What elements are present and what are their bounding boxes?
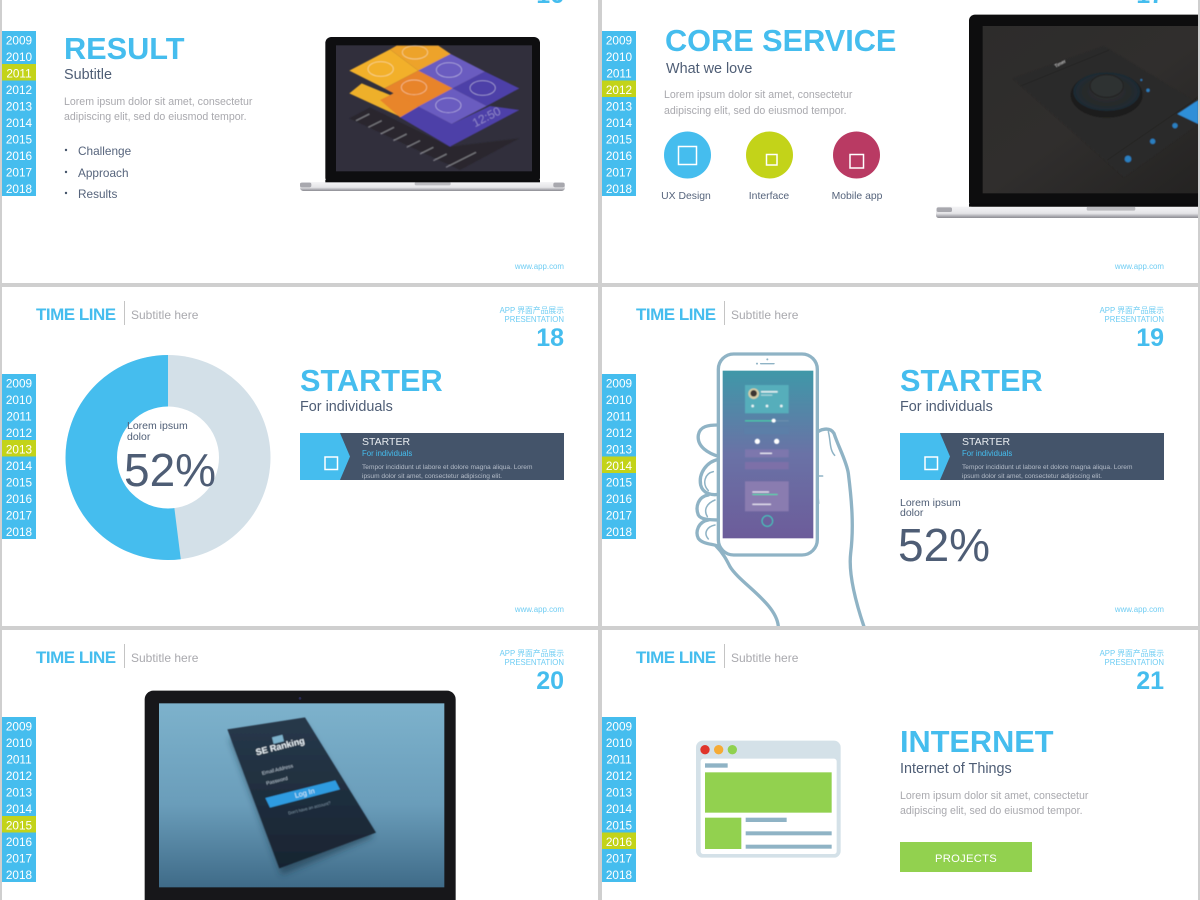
slide header: [636, 644, 799, 668]
panel: donut chart slide: [2, 287, 598, 626]
heading: CORE SERVICE: [665, 23, 896, 58]
subtitle: Internet of Things: [900, 761, 1012, 777]
year sidebar: 2014: [606, 802, 633, 816]
laptop with login screen: Log In: [294, 786, 316, 800]
year sidebar: 2009: [606, 720, 632, 734]
year sidebar: [602, 374, 636, 539]
year sidebar: 2017: [6, 852, 32, 866]
slide header: Subtitle here: [731, 651, 799, 665]
year sidebar: 2011: [6, 410, 32, 424]
donut chart 52%: [66, 355, 270, 560]
starter banner: Tempor incididunt ut labore et dolore magna aliqua. Lorem: [962, 464, 1133, 471]
presentation tag and page number: 18: [536, 324, 564, 352]
service: mobile app: Mobile app: [832, 191, 883, 202]
heading: STARTER: [900, 363, 1043, 398]
year sidebar: 2014: [6, 459, 33, 473]
starter banner: For individuals: [962, 449, 1012, 458]
year sidebar: 2015: [6, 476, 33, 490]
presentation tag and page number: APP 界面产品展示: [1100, 648, 1164, 658]
laptop with login screen: Password: [266, 776, 289, 787]
year sidebar: 2018: [606, 525, 633, 539]
year sidebar: 2016: [6, 835, 33, 849]
slide header: Subtitle here: [731, 308, 799, 322]
year sidebar: 2016: [6, 149, 33, 163]
year sidebar: 2018: [6, 182, 33, 196]
year sidebar: 2011: [6, 66, 32, 80]
year sidebar: 2017: [6, 166, 32, 180]
bullet list: Results: [78, 187, 117, 201]
presentation tag and page number: PRESENTATION: [1104, 315, 1164, 324]
statistic 52%: Lorem ipsum: [900, 497, 961, 509]
year sidebar: 2015: [606, 818, 633, 832]
presentation tag and page number: APP 界面产品展示: [1100, 305, 1164, 315]
presentation tag and page number: [500, 648, 564, 695]
presentation tag and page number: 21: [1136, 667, 1164, 695]
starter banner: STARTER: [362, 436, 410, 448]
year sidebar: 2015: [6, 818, 33, 832]
bullet list: Challenge: [78, 144, 132, 158]
year sidebar: 2012: [6, 83, 32, 97]
presentation tag and page number: APP 界面产品展示: [500, 648, 564, 658]
year sidebar: 2010: [6, 736, 33, 750]
presentation tag and page number: 20: [536, 667, 564, 695]
year sidebar: 2010: [606, 393, 633, 407]
year sidebar: 2012: [606, 769, 632, 783]
year sidebar: 2009: [606, 376, 632, 390]
year sidebar: [602, 31, 636, 196]
year sidebar: [2, 717, 36, 882]
website url: www.app.com: [1114, 605, 1164, 614]
starter banner: [900, 433, 1164, 480]
year sidebar: 2010: [6, 50, 33, 64]
year sidebar: 2014: [606, 116, 633, 130]
presentation tag and page number: PRESENTATION: [504, 658, 564, 667]
starter banner: [300, 433, 564, 480]
slide header: TIME LINE: [636, 305, 716, 324]
laptop with dark timer app: Timer: [1054, 58, 1067, 69]
panel: phone in hand slide: [602, 287, 1198, 627]
laptop with layered app screens: 12:50: [470, 104, 503, 130]
heading: STARTER: [300, 363, 443, 398]
body text: adipiscing elit, sed do eiusmod tempor.: [900, 805, 1083, 817]
subtitle: Subtitle: [64, 67, 112, 83]
slide header: [36, 301, 199, 325]
year sidebar: 2009: [6, 720, 32, 734]
year sidebar: 2015: [6, 132, 33, 146]
bullet list: [65, 144, 132, 201]
icon: browser window: [696, 741, 841, 858]
projects button: [900, 842, 1032, 872]
presentation tag and page number: 19: [1136, 324, 1164, 352]
year sidebar: 2018: [606, 868, 633, 882]
slide header: Subtitle here: [131, 651, 199, 665]
year sidebar: 2011: [606, 752, 632, 766]
slide header: TIME LINE: [36, 648, 116, 667]
starter banner: ipsum dolor sit amet, consectetur adipiscing elit.: [962, 473, 1102, 480]
website url: www.app.com: [514, 605, 564, 614]
website url: www.app.com: [514, 262, 564, 271]
year sidebar: 2018: [6, 525, 33, 539]
service: interface: [746, 132, 793, 202]
year sidebar: [2, 374, 36, 539]
presentation tag and page number: [1100, 305, 1164, 352]
presentation tag and page number: [500, 305, 564, 352]
year sidebar: 2010: [606, 50, 633, 64]
subtitle: For individuals: [900, 399, 993, 415]
body text: adipiscing elit, sed do eiusmod tempor.: [664, 105, 847, 117]
service: UX design: [661, 132, 711, 202]
year sidebar: 2012: [606, 83, 632, 97]
slide header: Subtitle here: [131, 308, 199, 322]
year sidebar: 2012: [6, 769, 32, 783]
starter banner: ipsum dolor sit amet, consectetur adipiscing elit.: [362, 473, 502, 480]
year sidebar: 2013: [606, 786, 633, 800]
statistic 52%: 52%: [898, 519, 990, 571]
year sidebar: 2013: [606, 100, 633, 114]
subtitle: For individuals: [300, 399, 393, 415]
presentation tag and page number: [1100, 648, 1164, 695]
donut chart 52%: 52%: [124, 444, 216, 496]
year sidebar: 2010: [606, 736, 633, 750]
service: UX design: UX Design: [661, 191, 711, 202]
slide header: [36, 644, 199, 668]
projects button: PROJECTS: [935, 853, 997, 865]
year sidebar: 2011: [606, 66, 632, 80]
year sidebar: 2009: [6, 376, 32, 390]
heading: INTERNET: [900, 724, 1054, 759]
illustration: hand holding phone: [697, 354, 864, 627]
service: mobile app: [832, 132, 883, 202]
year sidebar: 2017: [606, 852, 632, 866]
year sidebar: 2013: [606, 442, 633, 456]
year sidebar: 2018: [606, 182, 633, 196]
year sidebar: 2012: [606, 426, 632, 440]
year sidebar: 2014: [606, 459, 633, 473]
laptop with login screen: SE Ranking: [255, 735, 306, 757]
year sidebar: 2015: [606, 476, 633, 490]
slide header: [636, 301, 799, 325]
body text: adipiscing elit, sed do eiusmod tempor.: [64, 111, 247, 123]
year sidebar: 2014: [6, 802, 33, 816]
body text: Lorem ipsum dolor sit amet, consectetur: [664, 89, 853, 101]
year sidebar: 2011: [6, 752, 32, 766]
presentation tag and page number: APP 界面产品展示: [500, 305, 564, 315]
heading: RESULT: [64, 31, 185, 66]
year sidebar: 2009: [6, 34, 32, 48]
body text: Lorem ipsum dolor sit amet, consectetur: [900, 790, 1089, 802]
year sidebar: 2016: [606, 835, 633, 849]
panel: core service slide: [602, 0, 1200, 283]
starter banner: STARTER: [962, 436, 1010, 448]
statistic 52%: dolor: [900, 507, 924, 519]
service: interface: Interface: [749, 191, 789, 202]
year sidebar: 2015: [606, 132, 633, 146]
year sidebar: 2012: [6, 426, 32, 440]
panel: internet slide: [602, 630, 1198, 900]
subtitle: What we love: [666, 61, 752, 77]
laptop with login screen: Email Address: [261, 763, 294, 777]
starter banner: For individuals: [362, 449, 412, 458]
presentation tag and page number: PRESENTATION: [1104, 658, 1164, 667]
bullet list: Approach: [78, 166, 128, 180]
year sidebar: 2013: [6, 442, 33, 456]
website url: www.app.com: [1114, 262, 1164, 271]
panel: laptop login slide: [2, 630, 598, 900]
year sidebar: 2017: [6, 508, 32, 522]
laptop with login screen: Don't have an account?: [288, 800, 332, 816]
year sidebar: 2013: [6, 786, 33, 800]
slide header: TIME LINE: [36, 305, 116, 324]
presentation tag and page number: PRESENTATION: [504, 315, 564, 324]
year sidebar: 2009: [606, 34, 632, 48]
donut chart 52%: Lorem ipsum: [127, 420, 188, 432]
slide header: TIME LINE: [636, 648, 716, 667]
year sidebar: 2018: [6, 868, 33, 882]
donut chart 52%: dolor: [127, 431, 151, 443]
year sidebar: 2016: [606, 492, 633, 506]
panel: result slide: [2, 0, 598, 283]
year sidebar: 2017: [606, 166, 632, 180]
year sidebar: [602, 717, 636, 882]
year sidebar: 2014: [6, 116, 33, 130]
year sidebar: 2016: [6, 492, 33, 506]
year sidebar: 2011: [606, 410, 632, 424]
year sidebar: 2010: [6, 393, 33, 407]
starter banner: Tempor incididunt ut labore et dolore magna aliqua. Lorem: [362, 464, 533, 471]
year sidebar: 2016: [606, 149, 633, 163]
laptop with login screen: [145, 691, 456, 900]
laptop with dark timer app: [936, 15, 1200, 218]
body text: Lorem ipsum dolor sit amet, consectetur: [64, 96, 253, 108]
laptop with layered app screens: [300, 37, 565, 191]
year sidebar: [2, 31, 36, 196]
year sidebar: 2017: [606, 508, 632, 522]
year sidebar: 2013: [6, 100, 33, 114]
